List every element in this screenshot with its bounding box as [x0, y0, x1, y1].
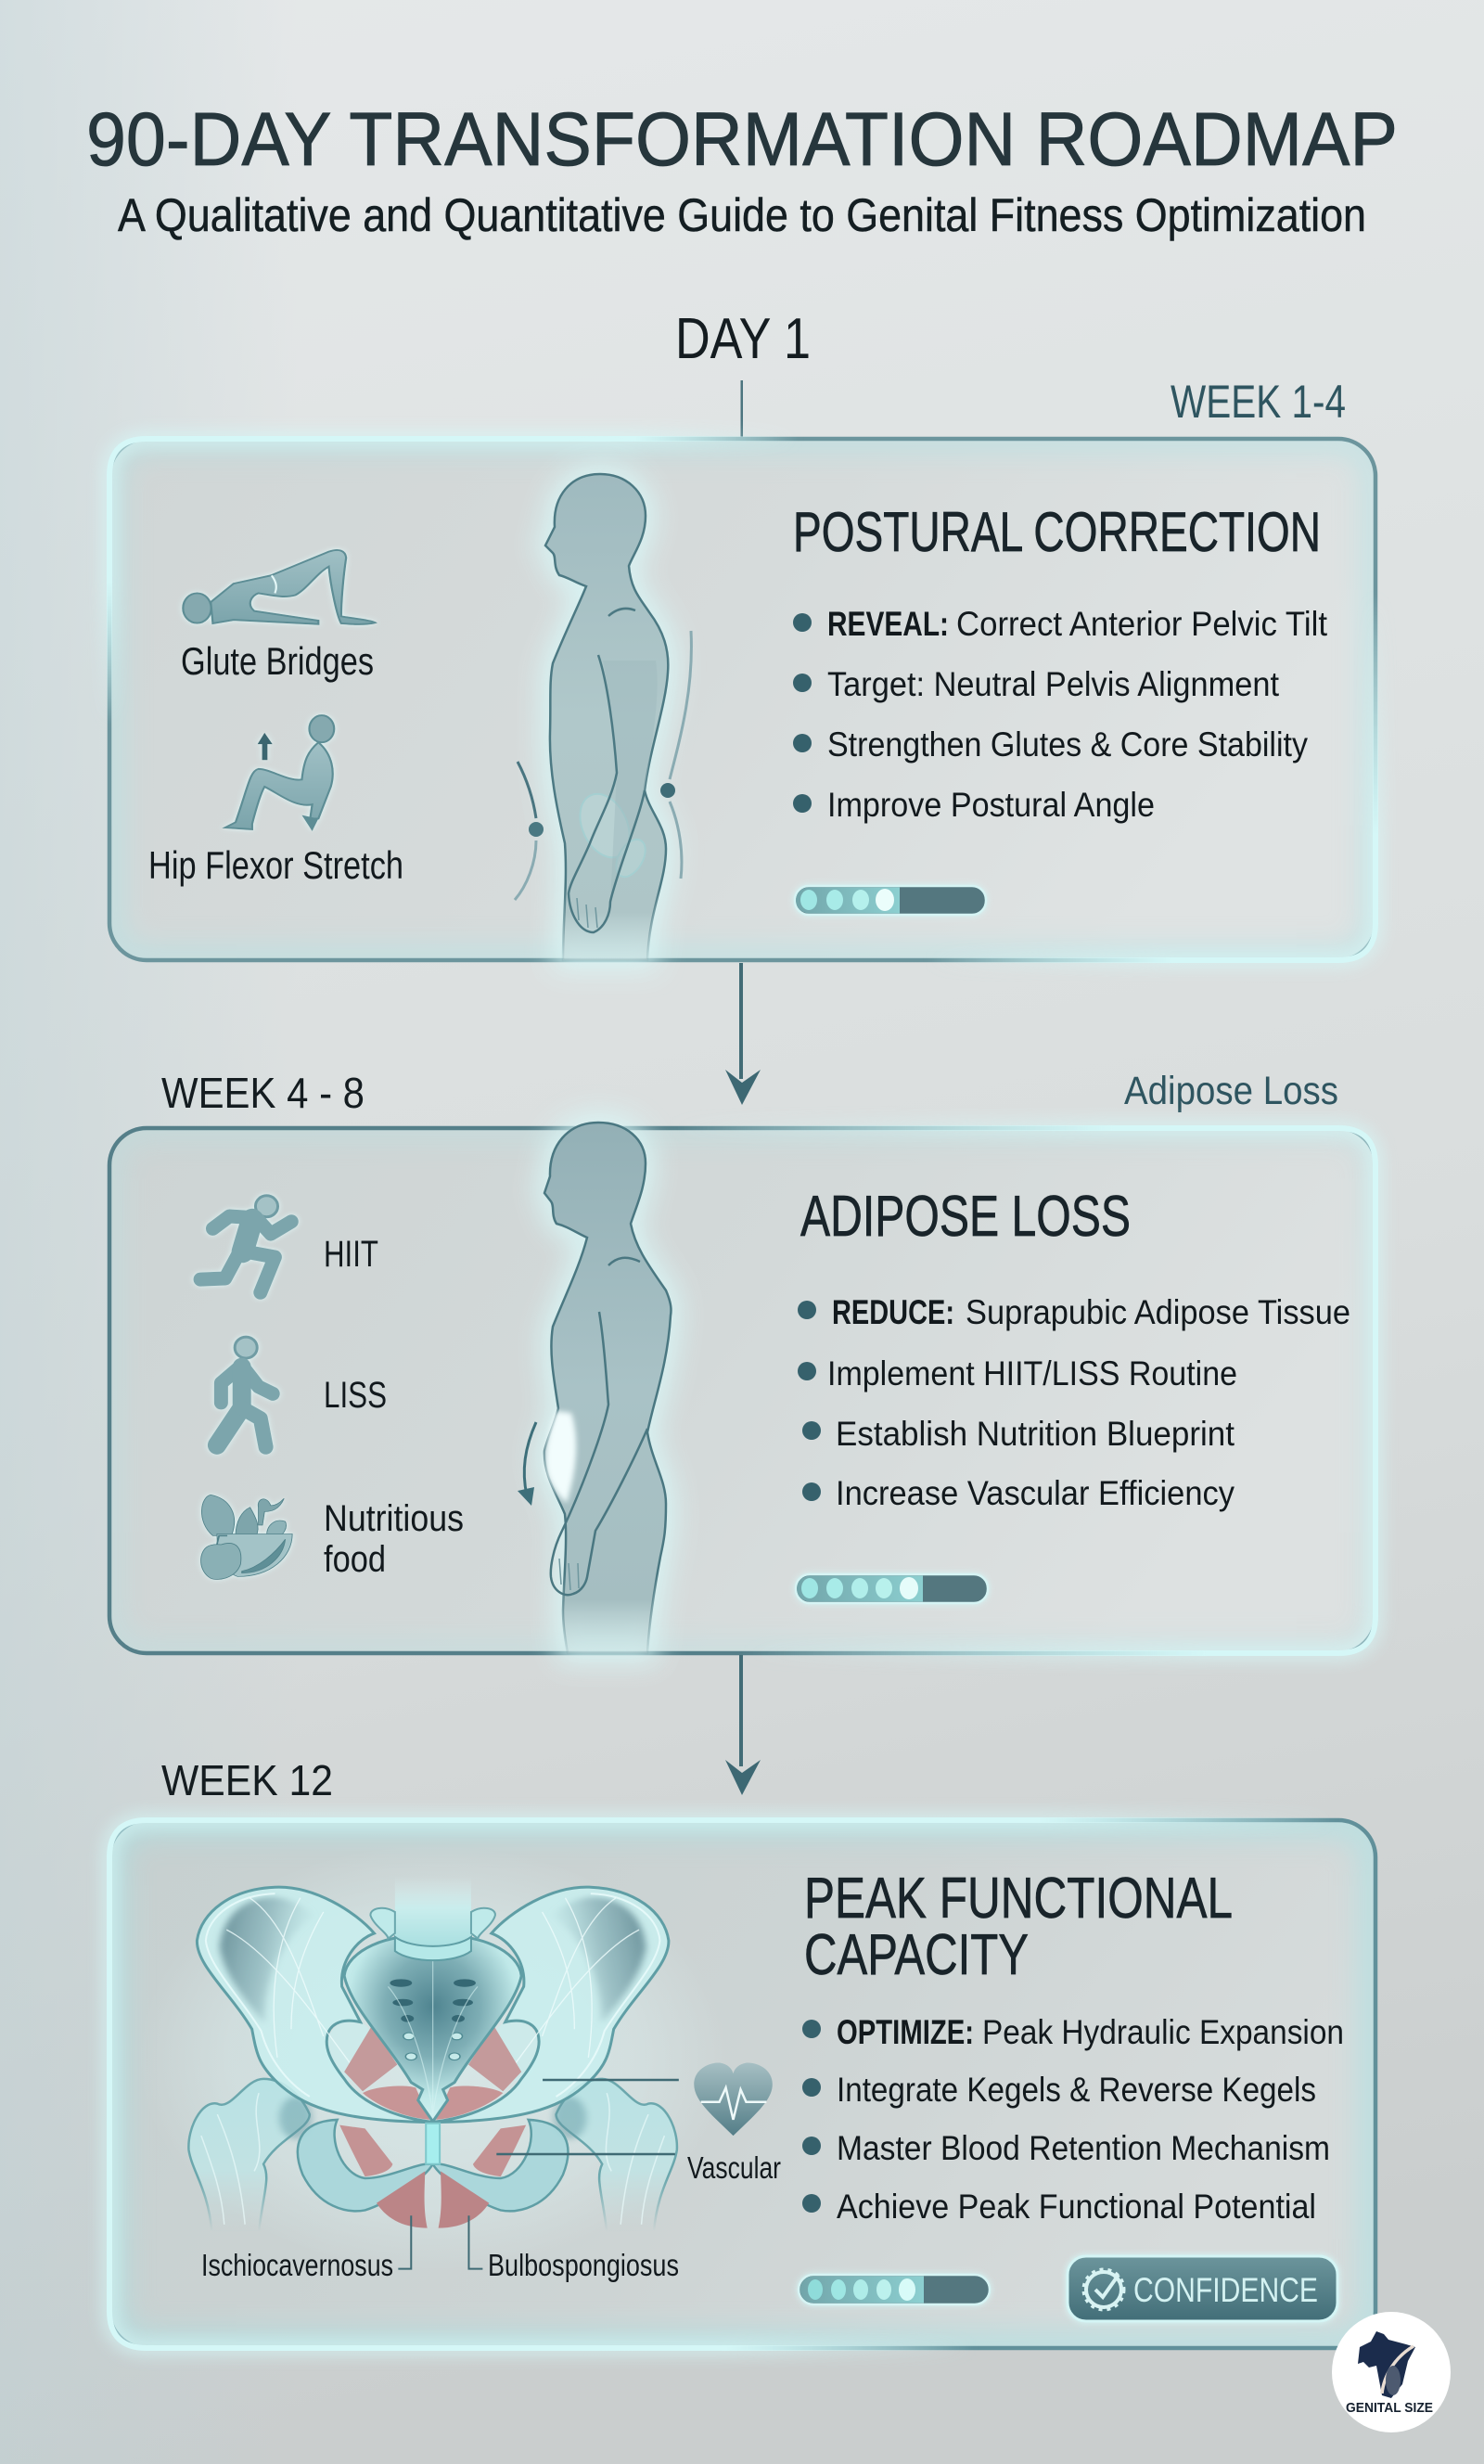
label: vascular: Vascular	[687, 2150, 781, 2185]
list: postural correction goals	[793, 605, 1328, 824]
heading: postural correction: POSTURAL CORRECTION	[793, 501, 1321, 563]
list: peak capacity goals: Master Blood Retention Mechanism	[837, 2129, 1330, 2167]
list: adipose loss goals: REDUCE:	[832, 1293, 954, 1331]
logo: genital size: GENITAL SIZE	[1346, 2400, 1433, 2416]
badge: confidence: CONFIDENCE	[1133, 2271, 1318, 2309]
title: 90-DAY TRANSFORMATION ROADMAP	[86, 97, 1398, 182]
progress bar: phase 2	[796, 1574, 988, 1603]
figure: standing side profile	[518, 1123, 671, 1653]
label: week 12: WEEK 12	[161, 1756, 333, 1804]
icon: nutritious food bowl	[201, 1495, 292, 1579]
list: peak capacity goals	[802, 2013, 1344, 2226]
list: peak capacity goals: Peak Hydraulic Expansion	[982, 2013, 1344, 2051]
progress bar: phase 1	[795, 886, 986, 915]
panel: adipose loss	[109, 1123, 1375, 1653]
label: ischiocavernosus: Ischiocavernosus	[201, 2248, 393, 2282]
icon: glute bridge	[183, 550, 375, 624]
panel: peak functional capacity	[109, 1820, 1375, 2348]
badge: confidence	[1068, 2256, 1337, 2321]
label: HIIT: HIIT	[324, 1234, 378, 1275]
icon: vascular heart	[694, 2063, 773, 2136]
list: postural correction goals: Correct Anterior Pelvic Tilt	[956, 605, 1328, 643]
subtitle: A Qualitative and Quantitative Guide to Genital Fitness Optimization	[118, 189, 1366, 241]
label: glute bridges: Glute Bridges	[181, 639, 374, 683]
panel: postural correction	[109, 439, 1375, 960]
label: hip flexor stretch: Hip Flexor Stretch	[148, 843, 403, 887]
label: nutritious food	[324, 1498, 464, 1580]
label: LISS: LISS	[324, 1375, 387, 1416]
list: peak capacity goals: Integrate Kegels & Reverse Kegels	[837, 2071, 1316, 2109]
label: nutritious food: Nutritious	[324, 1498, 464, 1539]
list: adipose loss goals	[798, 1293, 1350, 1512]
heading: adipose loss: ADIPOSE LOSS	[800, 1185, 1131, 1249]
list: postural correction goals: Strengthen Glutes & Core Stability	[827, 725, 1308, 764]
illustration: pelvis anatomy	[137, 1844, 728, 2271]
progress bar: phase 3	[799, 2275, 990, 2304]
connector: day 1 to panel 1	[740, 380, 743, 438]
figure: standing posture	[515, 474, 691, 960]
label: nutritious food: food	[324, 1539, 386, 1580]
list: postural correction goals: Improve Postural Angle	[827, 786, 1155, 824]
logo: genital size	[1332, 2312, 1451, 2432]
label: week 4-8: WEEK 4 - 8	[161, 1069, 365, 1117]
list: adipose loss goals: Establish Nutrition Blueprint	[836, 1415, 1235, 1453]
label: week 1-4: WEEK 1-4	[1171, 376, 1346, 428]
list: adipose loss goals: Increase Vascular Efficiency	[836, 1474, 1235, 1512]
heading: peak functional capacity: PEAK FUNCTIONAL	[804, 1867, 1233, 1931]
list: adipose loss goals: Suprapubic Adipose Tissue	[966, 1293, 1350, 1331]
icon: gear check	[1083, 2269, 1124, 2310]
arrow: phase 2 to phase 3	[725, 1655, 761, 1795]
icon: hip flexor stretch	[225, 715, 334, 831]
list: peak capacity goals: Achieve Peak Functional Potential	[837, 2188, 1316, 2226]
label: bulbospongiosus: Bulbospongiosus	[488, 2248, 679, 2282]
list: postural correction goals: REVEAL:	[827, 605, 949, 643]
icon: walker (LISS)	[217, 1337, 273, 1447]
list: postural correction goals: Target: Neutral Pelvis Alignment	[827, 665, 1280, 703]
list: peak capacity goals: OPTIMIZE:	[837, 2013, 974, 2051]
icon: runner (HIIT)	[200, 1196, 291, 1292]
heading: peak functional capacity	[804, 1867, 1233, 1987]
label: adipose loss tag: Adipose Loss	[1124, 1069, 1338, 1113]
label: day 1: DAY 1	[675, 307, 811, 371]
list: adipose loss goals: Implement HIIT/LISS Routine	[827, 1354, 1237, 1392]
arrow: phase 1 to phase 2	[725, 963, 761, 1105]
heading: peak functional capacity: CAPACITY	[804, 1923, 1029, 1987]
